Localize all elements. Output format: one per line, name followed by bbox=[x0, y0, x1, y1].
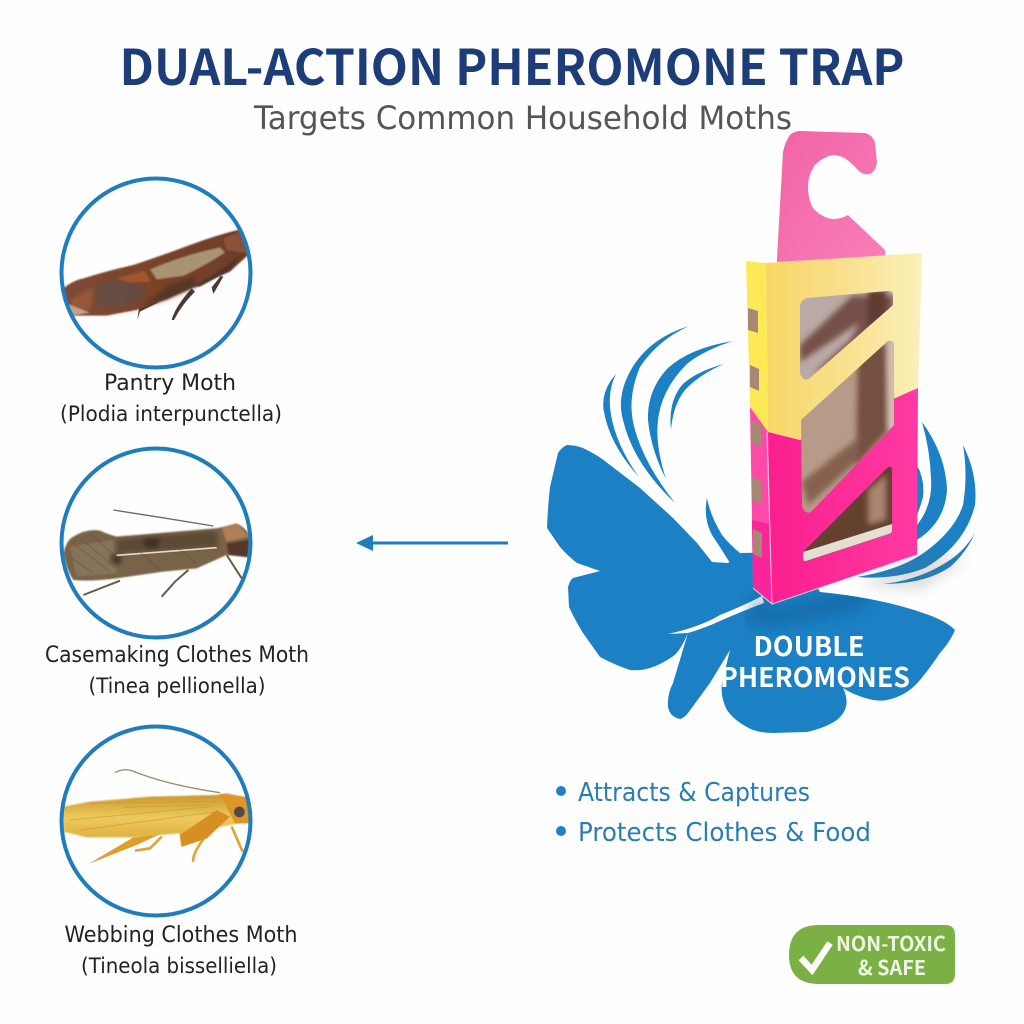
left pheromone waves bbox=[603, 326, 733, 503]
window: top bbox=[798, 290, 895, 382]
antenna bbox=[706, 498, 740, 563]
bullet: attracts: Attracts & Captures bbox=[578, 778, 810, 808]
text: double pheromones: PHEROMONES bbox=[720, 656, 910, 695]
arrow pointing to moths bbox=[356, 535, 508, 551]
front panel: pink bbox=[768, 388, 918, 604]
fold edge bbox=[753, 432, 917, 604]
wing highlight line bbox=[668, 596, 764, 634]
latin name: (Tinea pellionella) bbox=[88, 674, 266, 698]
shadow bbox=[860, 555, 965, 590]
ring bbox=[62, 726, 250, 916]
title: DUAL-ACTION PHEROMONE TRAP bbox=[120, 29, 904, 100]
text: double pheromones: DOUBLE bbox=[754, 625, 864, 664]
moth body and wings bbox=[547, 445, 955, 733]
moth card: webbing clothes moth bbox=[62, 726, 298, 978]
photo: casemaking moth bbox=[63, 510, 250, 597]
shadow on moth wing bbox=[742, 592, 870, 628]
window: middle bbox=[800, 340, 895, 516]
front panel: yellow bbox=[766, 253, 922, 440]
latin name: (Plodia interpunctella) bbox=[60, 402, 282, 426]
badge: non-toxic and safe bbox=[789, 925, 955, 984]
product: hanging trap box bbox=[746, 131, 965, 604]
badge: non-toxic and safe: & SAFE bbox=[858, 952, 926, 981]
photo: pantry moth bbox=[63, 229, 250, 320]
ring bbox=[62, 448, 250, 638]
side panel bbox=[746, 261, 768, 432]
bullet: protects: Protects Clothes & Food bbox=[578, 818, 871, 848]
window: bottom bbox=[803, 466, 892, 562]
label: Casemaking Clothes Moth bbox=[45, 643, 309, 668]
label: Webbing Clothes Moth bbox=[64, 923, 298, 948]
label: Pantry Moth bbox=[104, 371, 236, 396]
badge text: NON-TOXIC bbox=[836, 928, 946, 957]
text: double pheromones bbox=[720, 625, 910, 695]
side holes bbox=[748, 308, 762, 558]
right pheromone waves bbox=[857, 422, 976, 584]
photo: webbing moth bbox=[63, 770, 250, 864]
icon: blue moth silhouette with pheromone waves bbox=[547, 326, 976, 733]
latin name: (Tineola bisselliella) bbox=[81, 954, 277, 978]
subtitle: Targets Common Household Moths bbox=[253, 99, 792, 137]
benefits list bbox=[556, 778, 871, 848]
moth card: pantry moth bbox=[60, 178, 282, 426]
icon: check mark bbox=[801, 943, 830, 970]
ring bbox=[62, 178, 250, 368]
hanger hook bbox=[777, 131, 885, 262]
moth card: casemaking clothes moth bbox=[45, 448, 309, 698]
